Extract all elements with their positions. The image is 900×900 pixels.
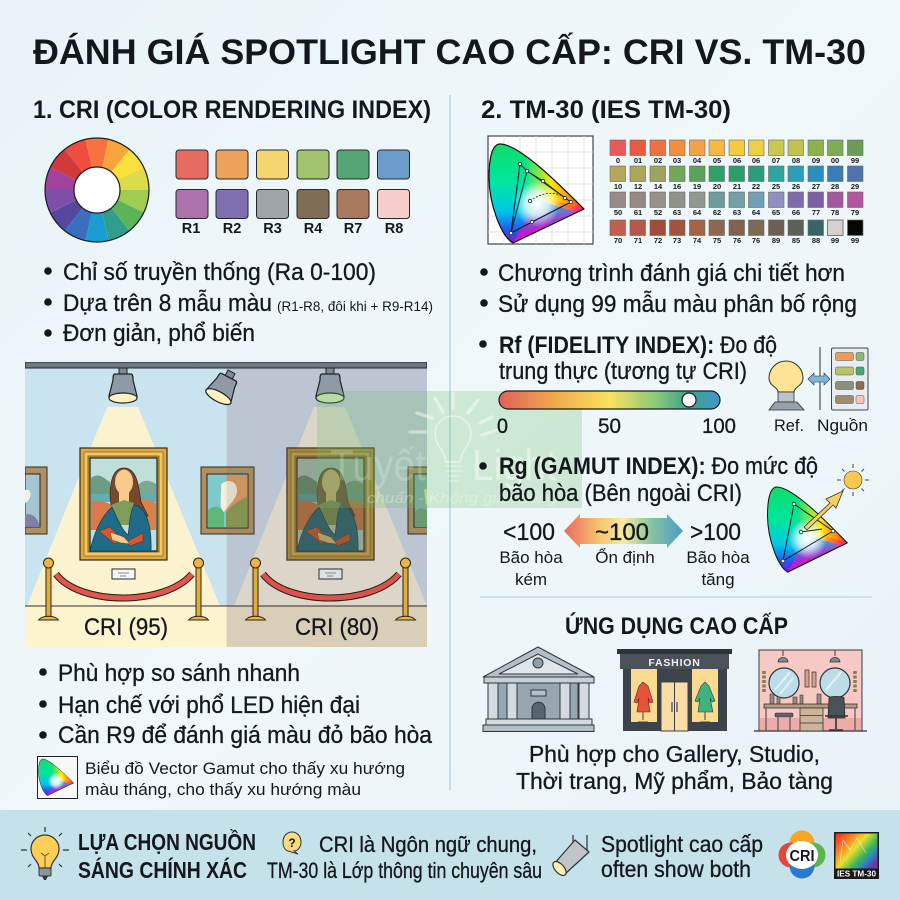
arrow: Rg scale: ~100 xyxy=(595,519,649,546)
bullet list: CRI facts xyxy=(44,259,433,347)
heading: premium applications: ỨNG DỤNG CAO CẤP xyxy=(565,612,788,640)
swatch grid labels: 12 xyxy=(634,182,642,191)
chart: Rf scale bar: 0 xyxy=(497,415,508,438)
chart: Rf scale bar: 100 xyxy=(702,415,736,438)
swatch grid labels: 14 xyxy=(654,182,663,191)
text: applications summary: Thời trang, Mỹ phẩm, Bảo tàng xyxy=(516,768,833,794)
swatch grid labels: 73 xyxy=(673,236,681,245)
heading: TM-30: 2. TM-30 (IES TM-30) xyxy=(481,96,731,124)
text: choose the right source: SÁNG CHÍNH XÁC xyxy=(78,856,247,883)
arrow: Rg scale xyxy=(499,514,750,589)
swatch grid labels: 76 xyxy=(733,236,741,245)
logo: CRI: CRI xyxy=(790,848,814,865)
swatch labels: R7 xyxy=(344,221,362,237)
bullet list: TM-30 facts xyxy=(480,260,857,318)
swatch grid labels xyxy=(614,156,859,245)
swatch grid labels: 62 xyxy=(713,208,721,217)
icon: makeup salon xyxy=(754,650,867,731)
arrow: Rg scale: Bão hòa xyxy=(686,548,750,567)
gallery illustration: CRI 95 vs CRI 80 xyxy=(25,362,430,647)
logo: IES TM-30: IES TM-30 xyxy=(837,870,877,878)
bullet list: CRI facts: Chỉ số truyền thống (Ra 0-100) xyxy=(63,259,376,286)
swatch grid labels: 20 xyxy=(713,182,721,191)
swatch grid labels: 00 xyxy=(831,156,839,165)
bullet list: CRI limits xyxy=(39,660,433,749)
title: ĐÁNH GIÁ SPOTLIGHT CAO CẤP: CRI VS. TM-30 xyxy=(33,32,866,72)
block: Rg gamut text: Rg (GAMUT INDEX): Đo mức độ xyxy=(499,453,818,480)
block: Rf fidelity text xyxy=(479,332,777,385)
swatch grid labels: 05 xyxy=(713,156,721,165)
swatch grid labels: 64 xyxy=(752,208,761,217)
swatch grid labels: 22 xyxy=(752,182,760,191)
swatch grid labels: 79 xyxy=(851,208,859,217)
icon: light bulb xyxy=(21,827,69,880)
bullet list: TM-30 facts: Chương trình đánh giá chi tiết hơn xyxy=(498,260,845,287)
swatch grid labels: 85 xyxy=(792,236,800,245)
ropes and posts xyxy=(38,558,416,620)
labels: CRI values xyxy=(85,617,378,640)
swatch grid labels: 07 xyxy=(772,156,780,165)
swatch grid labels: 28 xyxy=(831,182,839,191)
swatch grid labels: 25 xyxy=(772,182,780,191)
chart: Rf scale bar xyxy=(497,391,736,438)
swatch labels: R1 xyxy=(182,221,200,237)
text: applications summary xyxy=(516,741,833,794)
ceiling rail xyxy=(25,362,427,368)
footer band xyxy=(0,810,900,900)
swatch grid labels: 99 xyxy=(851,156,859,165)
swatch grid labels: 89 xyxy=(772,236,780,245)
icon: question bubble: ? xyxy=(288,836,296,850)
swatch grid labels: 65 xyxy=(772,208,780,217)
bullet list: CRI facts: (R1-R8, đôi khi + R9-R14) xyxy=(277,298,433,314)
icon: color wheel xyxy=(44,137,150,243)
watermark xyxy=(317,391,582,508)
block: Rf fidelity text: Rf (FIDELITY INDEX): Đo độ xyxy=(499,332,777,359)
text: choose the right source xyxy=(78,828,256,883)
text: spotlight summary xyxy=(601,831,763,882)
swatch grid labels: 50 xyxy=(614,208,622,217)
icon: vector gamut chart xyxy=(38,756,78,798)
swatch grid labels: 75 xyxy=(713,236,721,245)
text: CRI and TM-30 summary: TM-30 là Lớp thông tin chuyên sâu xyxy=(267,858,542,883)
bullet list: CRI limits: Phù hợp so sánh nhanh xyxy=(58,660,300,687)
arrow: Rg scale: <100 xyxy=(503,519,555,546)
swatch grid labels: 0 xyxy=(616,156,620,165)
icon: fashion shop xyxy=(617,649,732,731)
bullet list: CRI facts: Đơn giản, phổ biến xyxy=(63,320,255,347)
icon: reference bulb vs source xyxy=(769,347,868,435)
swatch grid labels: 61 xyxy=(634,208,642,217)
text: spotlight summary: often show both xyxy=(601,856,751,882)
swatch grid labels: 02 xyxy=(654,156,662,165)
swatch grid labels: 78 xyxy=(831,208,839,217)
swatch grid labels: 01 xyxy=(634,156,642,165)
plaques xyxy=(112,569,342,579)
swatch grid labels: 72 xyxy=(654,236,662,245)
icon: reference bulb vs source: Nguồn xyxy=(817,416,868,435)
swatch grid labels: 10 xyxy=(614,182,622,191)
watermark: Light xyxy=(472,441,557,490)
block: Rf fidelity text: trung thực (tương tự CRI) xyxy=(499,358,747,385)
swatch labels: R8 xyxy=(385,221,403,237)
main painting: true colour xyxy=(80,448,167,560)
watermark: chuẩn - Không gian sống xyxy=(367,490,558,507)
text: choose the right source: LỰA CHỌN NGUỒN xyxy=(78,828,256,855)
swatch grid labels: 76 xyxy=(752,236,760,245)
text: CRI and TM-30 summary: CRI là Ngôn ngữ chung, xyxy=(319,832,537,857)
swatch grid: 99 samples xyxy=(610,140,863,236)
arrow: Rg scale: Bão hòa xyxy=(499,548,563,567)
bullet list: CRI limits: Hạn chế với phổ LED hiện đại xyxy=(58,692,360,719)
swatch labels xyxy=(182,221,403,237)
swatch labels: R2 xyxy=(223,221,241,237)
swatch grid labels: 16 xyxy=(673,182,681,191)
main painting: dull colour xyxy=(287,448,374,560)
swatch grid labels: 66 xyxy=(792,208,800,217)
light beams xyxy=(27,407,427,606)
swatch grid labels: 08 xyxy=(792,156,800,165)
panel: CRI xyxy=(25,96,433,799)
labels: CRI values: CRI (95) xyxy=(84,614,168,641)
text: CRI and TM-30 summary xyxy=(267,832,542,883)
color swatches R1-R8 xyxy=(176,150,410,218)
icon: museum xyxy=(483,647,594,732)
logo: IES TM-30 xyxy=(834,832,879,879)
swatch grid labels: 63 xyxy=(673,208,681,217)
swatch grid labels: 19 xyxy=(693,182,701,191)
swatch labels: R4 xyxy=(304,221,322,237)
bullet list: CRI limits: Cần R9 để đánh giá màu đỏ bão hòa xyxy=(58,722,433,749)
icon: spotlight xyxy=(550,835,589,878)
swatch grid labels: 21 xyxy=(733,182,741,191)
note: vector gamut: Biểu đồ Vector Gamut cho thấy xu hướng xyxy=(85,759,405,778)
swatch grid labels: 27 xyxy=(812,182,820,191)
watermark: Tuyết xyxy=(330,441,426,490)
swatch grid labels: 29 xyxy=(851,182,859,191)
swatch labels: R3 xyxy=(263,221,282,237)
swatch grid labels: 26 xyxy=(792,182,800,191)
spotlights xyxy=(108,368,345,406)
arrow: Rg scale: kém xyxy=(515,570,547,589)
swatch grid labels: 71 xyxy=(634,236,642,245)
swatch grid labels: 04 xyxy=(693,156,702,165)
bullet list: TM-30 facts: Sử dụng 99 mẫu màu phân bố rộng xyxy=(498,291,857,318)
bullet list: CRI facts: Dựa trên 8 mẫu màu xyxy=(63,290,272,317)
swatch grid labels: 77 xyxy=(812,208,820,217)
swatch grid labels: 06 xyxy=(733,156,741,165)
swatch grid labels: 88 xyxy=(812,236,820,245)
swatch grid labels: 74 xyxy=(693,236,702,245)
block: Rg gamut text xyxy=(479,453,818,507)
panel: TM-30 xyxy=(479,96,872,794)
swatch grid labels: 63 xyxy=(733,208,741,217)
note: vector gamut: màu tháng, cho thấy xu hướng màu xyxy=(85,780,361,799)
small paintings xyxy=(25,467,430,534)
text: applications summary: Phù hợp cho Gallery, Studio, xyxy=(529,741,820,767)
icon: fashion shop: FASHION xyxy=(648,657,701,669)
heading: CRI: 1. CRI (COLOR RENDERING INDEX) xyxy=(33,96,431,124)
swatch grid labels: 70 xyxy=(614,236,622,245)
text: spotlight summary: Spotlight cao cấp xyxy=(601,831,763,857)
swatch grid labels: 99 xyxy=(831,236,839,245)
chart: CIE diagram xyxy=(487,136,593,246)
swatch grid labels: 06 xyxy=(752,156,760,165)
note: vector gamut xyxy=(85,759,405,799)
swatch grid labels: 52 xyxy=(654,208,662,217)
labels: CRI values: CRI (80) xyxy=(295,614,379,641)
icon: gamut expansion xyxy=(766,464,869,575)
swatch grid labels: 99 xyxy=(851,236,859,245)
swatch grid labels: 64 xyxy=(693,208,702,217)
block: Rg gamut text: bão hòa (Bên ngoài CRI) xyxy=(499,480,742,507)
swatch grid labels: 09 xyxy=(812,156,820,165)
swatch grid labels: 03 xyxy=(673,156,681,165)
chart: Rf scale bar: 50 xyxy=(598,415,621,438)
icon: reference bulb vs source: Ref. xyxy=(774,416,804,435)
arrow: Rg scale: Ổn định xyxy=(595,548,655,567)
icon: question bubble xyxy=(283,832,301,854)
arrow: Rg scale: tăng xyxy=(701,570,735,589)
arrow: Rg scale: >100 xyxy=(690,519,741,546)
logo: CRI xyxy=(778,830,826,878)
